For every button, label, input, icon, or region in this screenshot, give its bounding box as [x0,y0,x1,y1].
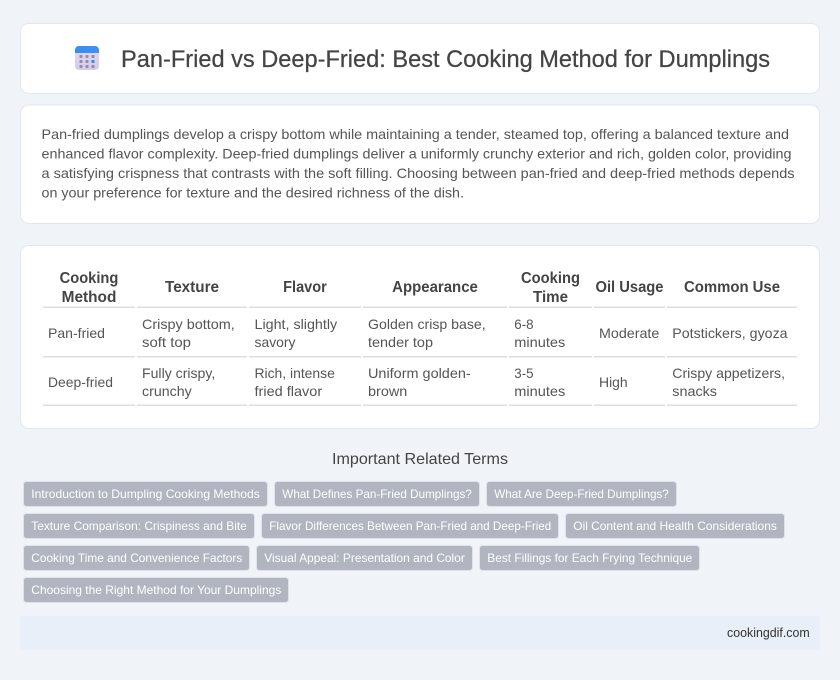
tag: Oil Content and Health Considerations [573,519,777,533]
table row: pan-fried: Golden crisp base, [368,316,486,332]
table card [20,246,820,428]
table header row: Method [62,289,116,306]
table row: deep-fried: crunchy [142,383,192,399]
table row: deep-fried: minutes [514,383,565,399]
tag [480,546,700,570]
table row: deep-fried: Crispy appetizers, [672,365,785,381]
description text: enhanced flavor complexity. Deep-fried dumplings deliver a uniformly crunchy exterior and rich, golden color, providing [42,146,792,162]
related terms tags [24,482,784,602]
tag [486,482,676,506]
table row: deep-fried: Rich, intense [254,365,335,381]
icon: calendar [75,46,99,70]
tag: Best Fillings for Each Frying Technique [487,551,693,565]
table header row: Common Use [684,279,780,296]
table header row: Flavor [283,279,327,296]
table row: deep-fried: snacks [672,383,717,399]
table row: pan-fried: tender top [368,334,433,350]
table row: deep-fried: Fully crispy, [142,365,215,381]
tag: What Are Deep-Fried Dumplings? [494,487,669,501]
table row: pan-fried: minutes [514,334,565,350]
footer bar [20,616,820,650]
table row: pan-fried: Crispy bottom, [142,316,235,332]
description text: Pan-fried dumplings develop a crispy bottom while maintaining a tender, steamed top, offering a balanced texture and [42,126,789,142]
table row: deep-fried: Deep-fried [48,374,113,390]
tag [24,514,254,538]
tag: Introduction to Dumpling Cooking Methods [31,487,260,501]
table row: pan-fried [48,316,788,350]
panel: comparison table [20,246,820,428]
tag: Choosing the Right Method for Your Dumplings [31,583,281,597]
description text: on your preference for texture and the desired richness of the dish. [42,184,464,200]
footer [20,616,820,650]
description text [42,126,794,200]
table row: pan-fried: 6-8 [514,316,534,332]
table row: deep-fried: brown [368,383,407,399]
tag: Visual Appeal: Presentation and Color [264,551,465,565]
tag [24,482,268,506]
tag [24,578,288,602]
tag [566,514,784,538]
tag: Texture Comparison: Crispiness and Bite [31,519,247,533]
table row: pan-fried: Pan-fried [48,325,105,341]
table row: deep-fried: 3-5 [514,365,534,381]
description card [20,105,820,224]
table row: pan-fried: savory [254,334,296,350]
table header row: Cooking [60,270,118,287]
table header row [60,270,780,306]
title: Pan-Fried vs Deep-Fried: Best Cooking Method for Dumplings [121,46,770,73]
tag: What Defines Pan-Fried Dumplings? [282,487,472,501]
table row: pan-fried: Moderate [599,325,660,341]
table header row: Texture [165,279,219,296]
tag [24,546,250,570]
tag [256,546,472,570]
table header row: Appearance [392,279,478,296]
tag [274,482,480,506]
table row: pan-fried: soft top [142,334,191,350]
header card [20,24,820,94]
heading: related terms: Important Related Terms [332,451,508,468]
table header row: Oil Usage [596,279,664,296]
table row: deep-fried: High [599,374,628,390]
panel: header [20,24,820,94]
table row: deep-fried: fried flavor [254,383,323,399]
table row: pan-fried: Light, slightly [254,316,337,332]
table row: deep-fried: Uniform golden- [368,365,471,381]
panel: description [20,105,820,224]
table header row: Cooking [521,270,580,287]
tag [262,514,558,538]
description text: a satisfying crispness that contrasts with the soft filling. Choosing between pan-fried and deep-fried methods depends [42,165,794,181]
table header row: Time [533,289,568,306]
footer credit: cookingdif.com [727,626,810,640]
tag: Cooking Time and Convenience Factors [31,551,242,565]
table row: pan-fried: Potstickers, gyoza [672,325,788,341]
table row: deep-fried [48,365,785,399]
tag: Flavor Differences Between Pan-Fried and Deep-Fried [269,519,551,533]
